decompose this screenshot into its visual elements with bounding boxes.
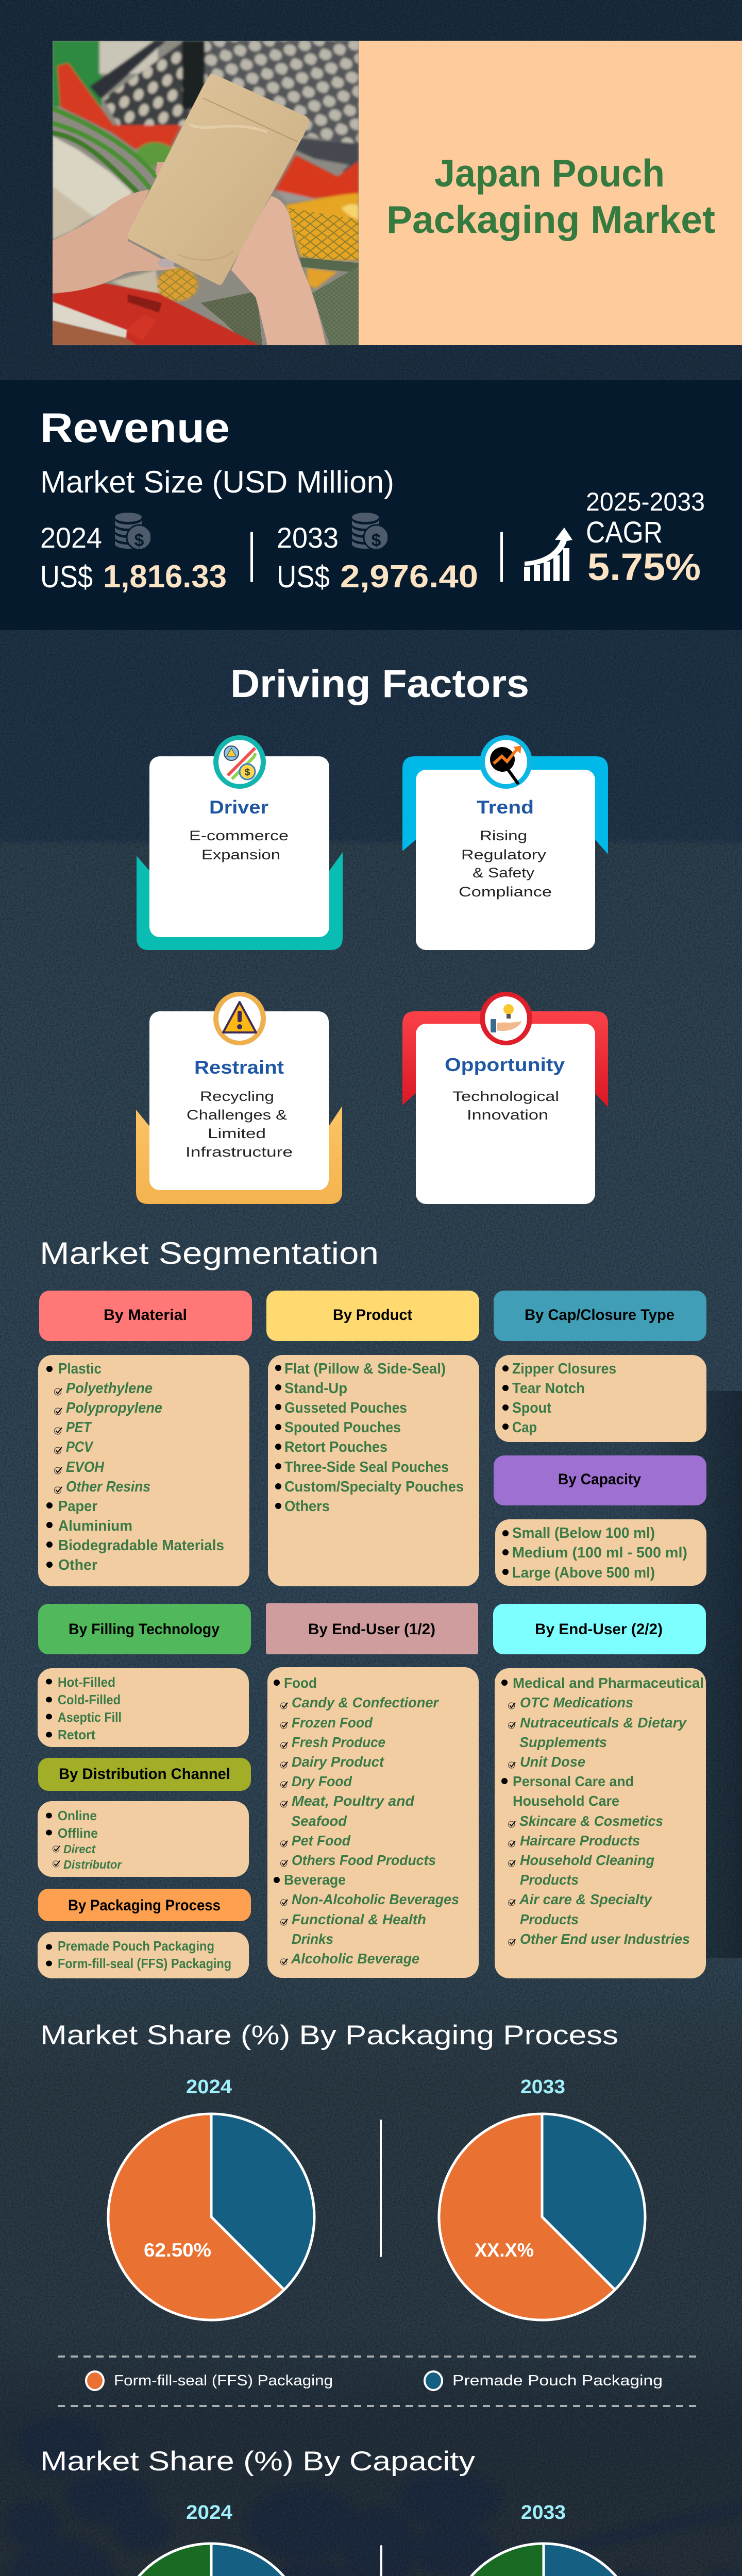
heading: market segmentation: Market Segmentation — [40, 1236, 379, 1270]
product list: Others — [284, 1498, 330, 1515]
product list — [275, 1361, 464, 1515]
card: trend: Trend — [477, 796, 534, 818]
material list: Polypropylene — [66, 1400, 162, 1416]
heading: market share by capacity: Market Share (%) By Capacity — [40, 2446, 476, 2477]
filling list: Cold-Filled — [58, 1692, 121, 1707]
end-user 1 list: Beverage — [284, 1872, 346, 1888]
restraint text: Limited — [208, 1126, 266, 1141]
end-user 2 list: Household Cleaning — [520, 1852, 654, 1868]
CAGR figure: CAGR — [586, 516, 663, 549]
end-user 2 list: Haircare Products — [520, 1833, 640, 1849]
restraint text: Recycling — [200, 1089, 274, 1104]
heading: driving factors: Driving Factors — [230, 662, 529, 706]
material list — [46, 1361, 224, 1573]
icon: growth chart — [524, 528, 572, 581]
panel: by product: By Product — [333, 1307, 412, 1324]
panel: by capacity — [494, 1455, 706, 1586]
end-user 2 list — [501, 1675, 704, 1947]
legend: packaging process: Premade Pouch Packaging — [452, 2372, 663, 2389]
panel: by distribution channel: By Distribution Channel — [59, 1766, 230, 1783]
end-user 2 list: Household Care — [513, 1793, 619, 1809]
restraint text: Challenges & — [187, 1107, 287, 1123]
card: driver — [137, 735, 343, 950]
material list: Aluminium — [58, 1518, 132, 1534]
CAGR figure: 2025-2033 — [586, 487, 705, 516]
icon: warning triangle — [213, 992, 266, 1045]
end-user 2 list: Medical and Pharmaceutical — [513, 1675, 704, 1691]
end-user 1 list: Non-Alcoholic Beverages — [292, 1891, 459, 1907]
legend: packaging process — [86, 2371, 663, 2390]
hero title panel — [359, 41, 742, 345]
card: opportunity: Opportunity — [445, 1054, 565, 1075]
distribution list: Direct — [63, 1842, 96, 1856]
panel: by packaging process: By Packaging Process — [68, 1897, 221, 1914]
end-user 2 list: Unit Dose — [520, 1754, 585, 1770]
filling list: Retort — [58, 1727, 95, 1742]
distribution list — [46, 1808, 122, 1871]
pie chart: packaging process 2024: 2024 — [186, 2076, 232, 2098]
revenue heading: Revenue — [40, 405, 230, 451]
panel: by end-user 2/2: By End-User (2/2) — [535, 1621, 663, 1638]
hero title panel: Japan Pouch — [434, 151, 665, 195]
material list: PET — [66, 1419, 92, 1436]
2033 revenue figure: $ — [372, 531, 381, 550]
card: trend — [402, 735, 608, 950]
card: restraint — [136, 992, 342, 1204]
capacity list: Large (Above 500 ml) — [512, 1565, 655, 1581]
market size subheading: Market Size (USD Million) — [40, 465, 394, 499]
pie chart: packaging process 2033: XX.X% — [475, 2240, 534, 2261]
2024 revenue figure: $ — [134, 531, 144, 550]
cap list: Tear Notch — [512, 1380, 585, 1397]
material list: Paper — [58, 1498, 97, 1515]
end-user 1 list: Pet Food — [292, 1833, 351, 1849]
product list: Stand-Up — [284, 1380, 347, 1397]
cap list — [502, 1361, 616, 1436]
restraint text — [185, 1089, 293, 1160]
product list: Retort Pouches — [284, 1439, 387, 1455]
trend text: Rising — [480, 828, 527, 843]
trend text: & Safety — [473, 865, 535, 880]
distribution list: Offline — [58, 1825, 98, 1841]
driver text: E-commerce — [189, 828, 289, 843]
pie chart: capacity 2024: 2024 — [186, 2502, 232, 2523]
packaging process list — [46, 1938, 231, 1971]
cap list: Zipper Closures — [512, 1361, 616, 1377]
hero photo: hands holding kraft pouch — [53, 41, 359, 345]
opportunity text: Innovation — [467, 1107, 548, 1123]
product list: Spouted Pouches — [284, 1419, 401, 1436]
restraint text: Infrastructure — [185, 1144, 293, 1160]
capacity list: Medium (100 ml - 500 ml) — [512, 1545, 687, 1561]
panel: by end-user 1/2 — [266, 1603, 479, 1978]
2024 revenue figure: US$ — [40, 560, 93, 594]
icon: driver gears and arrows: $ — [245, 767, 250, 778]
pie chart: packaging process 2033: 2033 — [520, 2076, 565, 2098]
filling list: Hot-Filled — [58, 1674, 115, 1690]
material list: Other Resins — [66, 1479, 150, 1495]
end-user 1 list: Food — [284, 1675, 317, 1691]
panel: by distribution channel — [38, 1758, 251, 1877]
filling list: Aseptic Fill — [58, 1709, 122, 1725]
end-user 2 list: Air care & Specialty — [519, 1891, 652, 1907]
panel: by filling technology: By Filling Technology — [69, 1621, 220, 1638]
end-user 2 list: Skincare & Cosmetics — [519, 1813, 663, 1829]
product list: Custom/Specialty Pouches — [284, 1479, 464, 1495]
product list: Flat (Pillow & Side-Seal) — [284, 1361, 446, 1377]
revenue band — [0, 380, 742, 630]
driver text — [189, 828, 289, 862]
card: driver: Driver — [209, 796, 268, 818]
opportunity text: Technological — [452, 1089, 559, 1104]
material list: Polyethylene — [66, 1380, 153, 1397]
end-user 1 list: Dry Food — [292, 1773, 352, 1789]
distribution list: Online — [58, 1808, 97, 1823]
icon: driver gears and arrows — [213, 735, 266, 789]
end-user 1 list — [274, 1675, 459, 1967]
panel: by packaging process — [38, 1889, 251, 1978]
2033 revenue figure: US$ — [277, 560, 330, 594]
packaging process list: Form-fill-seal (FFS) Packaging — [58, 1956, 231, 1971]
end-user 1 list: Seafood — [291, 1813, 347, 1829]
2033 revenue figure — [277, 513, 478, 595]
icon: trend magnifier — [480, 735, 532, 789]
2024 revenue figure — [40, 513, 227, 595]
trend text — [459, 828, 552, 900]
material list: Plastic — [58, 1361, 102, 1377]
end-user 2 list: Products — [520, 1911, 579, 1927]
cap list: Spout — [512, 1400, 551, 1416]
end-user 1 list: Candy & Confectioner — [292, 1694, 440, 1710]
trend text: Regulatory — [461, 847, 547, 862]
pie chart: capacity 2033: 2033 — [521, 2502, 566, 2523]
2024 revenue figure: 1,816.33 — [103, 559, 227, 595]
panel: by capacity: By Capacity — [558, 1471, 641, 1488]
end-user 2 list: Nutraceuticals & Dietary — [520, 1715, 687, 1731]
material list: Other — [58, 1557, 97, 1573]
CAGR figure: 5.75% — [587, 546, 701, 588]
pie chart: capacity 2024 — [115, 2502, 308, 2576]
card: restraint: Restraint — [194, 1057, 284, 1078]
panel: by cap/closure type: By Cap/Closure Type — [525, 1307, 674, 1324]
panel: by product — [266, 1291, 479, 1586]
card: opportunity — [402, 992, 608, 1204]
end-user 2 list: Personal Care and — [513, 1773, 634, 1789]
end-user 2 list: Products — [520, 1872, 579, 1888]
panel: by material — [38, 1291, 252, 1586]
pie chart: packaging process 2024 — [108, 2076, 314, 2320]
hero title panel: Packaging Market — [386, 198, 715, 241]
legend: packaging process: Form-fill-seal (FFS) Packaging — [114, 2372, 333, 2389]
2033 revenue figure: 2,976.40 — [340, 559, 478, 595]
end-user 2 list: OTC Medications — [520, 1694, 633, 1710]
product list: Three-Side Seal Pouches — [284, 1459, 449, 1476]
pie chart: packaging process 2033 — [439, 2076, 645, 2320]
pie chart: packaging process 2024: 62.50% — [144, 2240, 211, 2261]
end-user 2 list: Other End user Industries — [520, 1931, 690, 1947]
end-user 1 list: Fresh Produce — [292, 1734, 385, 1750]
end-user 2 list: Supplements — [519, 1734, 607, 1750]
trend text: Compliance — [459, 884, 552, 900]
CAGR figure — [586, 487, 705, 588]
panel: by material: By Material — [104, 1307, 187, 1324]
material list: Biodegradable Materials — [58, 1537, 224, 1554]
cap list: Cap — [512, 1419, 537, 1436]
driver text: Expansion — [201, 847, 280, 862]
material list: PCV — [66, 1439, 94, 1455]
end-user 1 list: Alcoholic Beverage — [291, 1951, 419, 1967]
filling list — [46, 1674, 122, 1742]
packaging process list: Premade Pouch Packaging — [58, 1938, 214, 1954]
product list: Gusseted Pouches — [284, 1400, 407, 1416]
opportunity text — [452, 1089, 559, 1123]
end-user 1 list: Dairy Product — [292, 1754, 385, 1770]
icon: lightbulb on hand — [480, 992, 532, 1045]
material list: EVOH — [66, 1459, 105, 1476]
capacity list: Small (Below 100 ml) — [512, 1525, 655, 1541]
capacity list — [502, 1525, 687, 1581]
panel: by filling technology — [38, 1604, 251, 1747]
end-user 1 list: Frozen Food — [292, 1715, 373, 1731]
pie chart: capacity 2033 — [447, 2502, 640, 2576]
2024 revenue figure: 2024 — [40, 521, 102, 554]
end-user 1 list: Drinks — [292, 1931, 333, 1947]
2033 revenue figure: 2033 — [277, 521, 339, 554]
end-user 1 list: Functional & Health — [292, 1911, 426, 1927]
distribution list: Distributor — [63, 1858, 122, 1871]
panel: by cap/closure type — [494, 1291, 706, 1442]
heading: market share by packaging process: Market Share (%) By Packaging Process — [40, 2020, 618, 2050]
panel: by end-user 2/2 — [493, 1604, 706, 1978]
panel: by end-user 1/2: By End-User (1/2) — [308, 1621, 435, 1638]
end-user 1 list: Meat, Poultry and — [292, 1793, 415, 1809]
end-user 1 list: Others Food Products — [292, 1852, 436, 1868]
